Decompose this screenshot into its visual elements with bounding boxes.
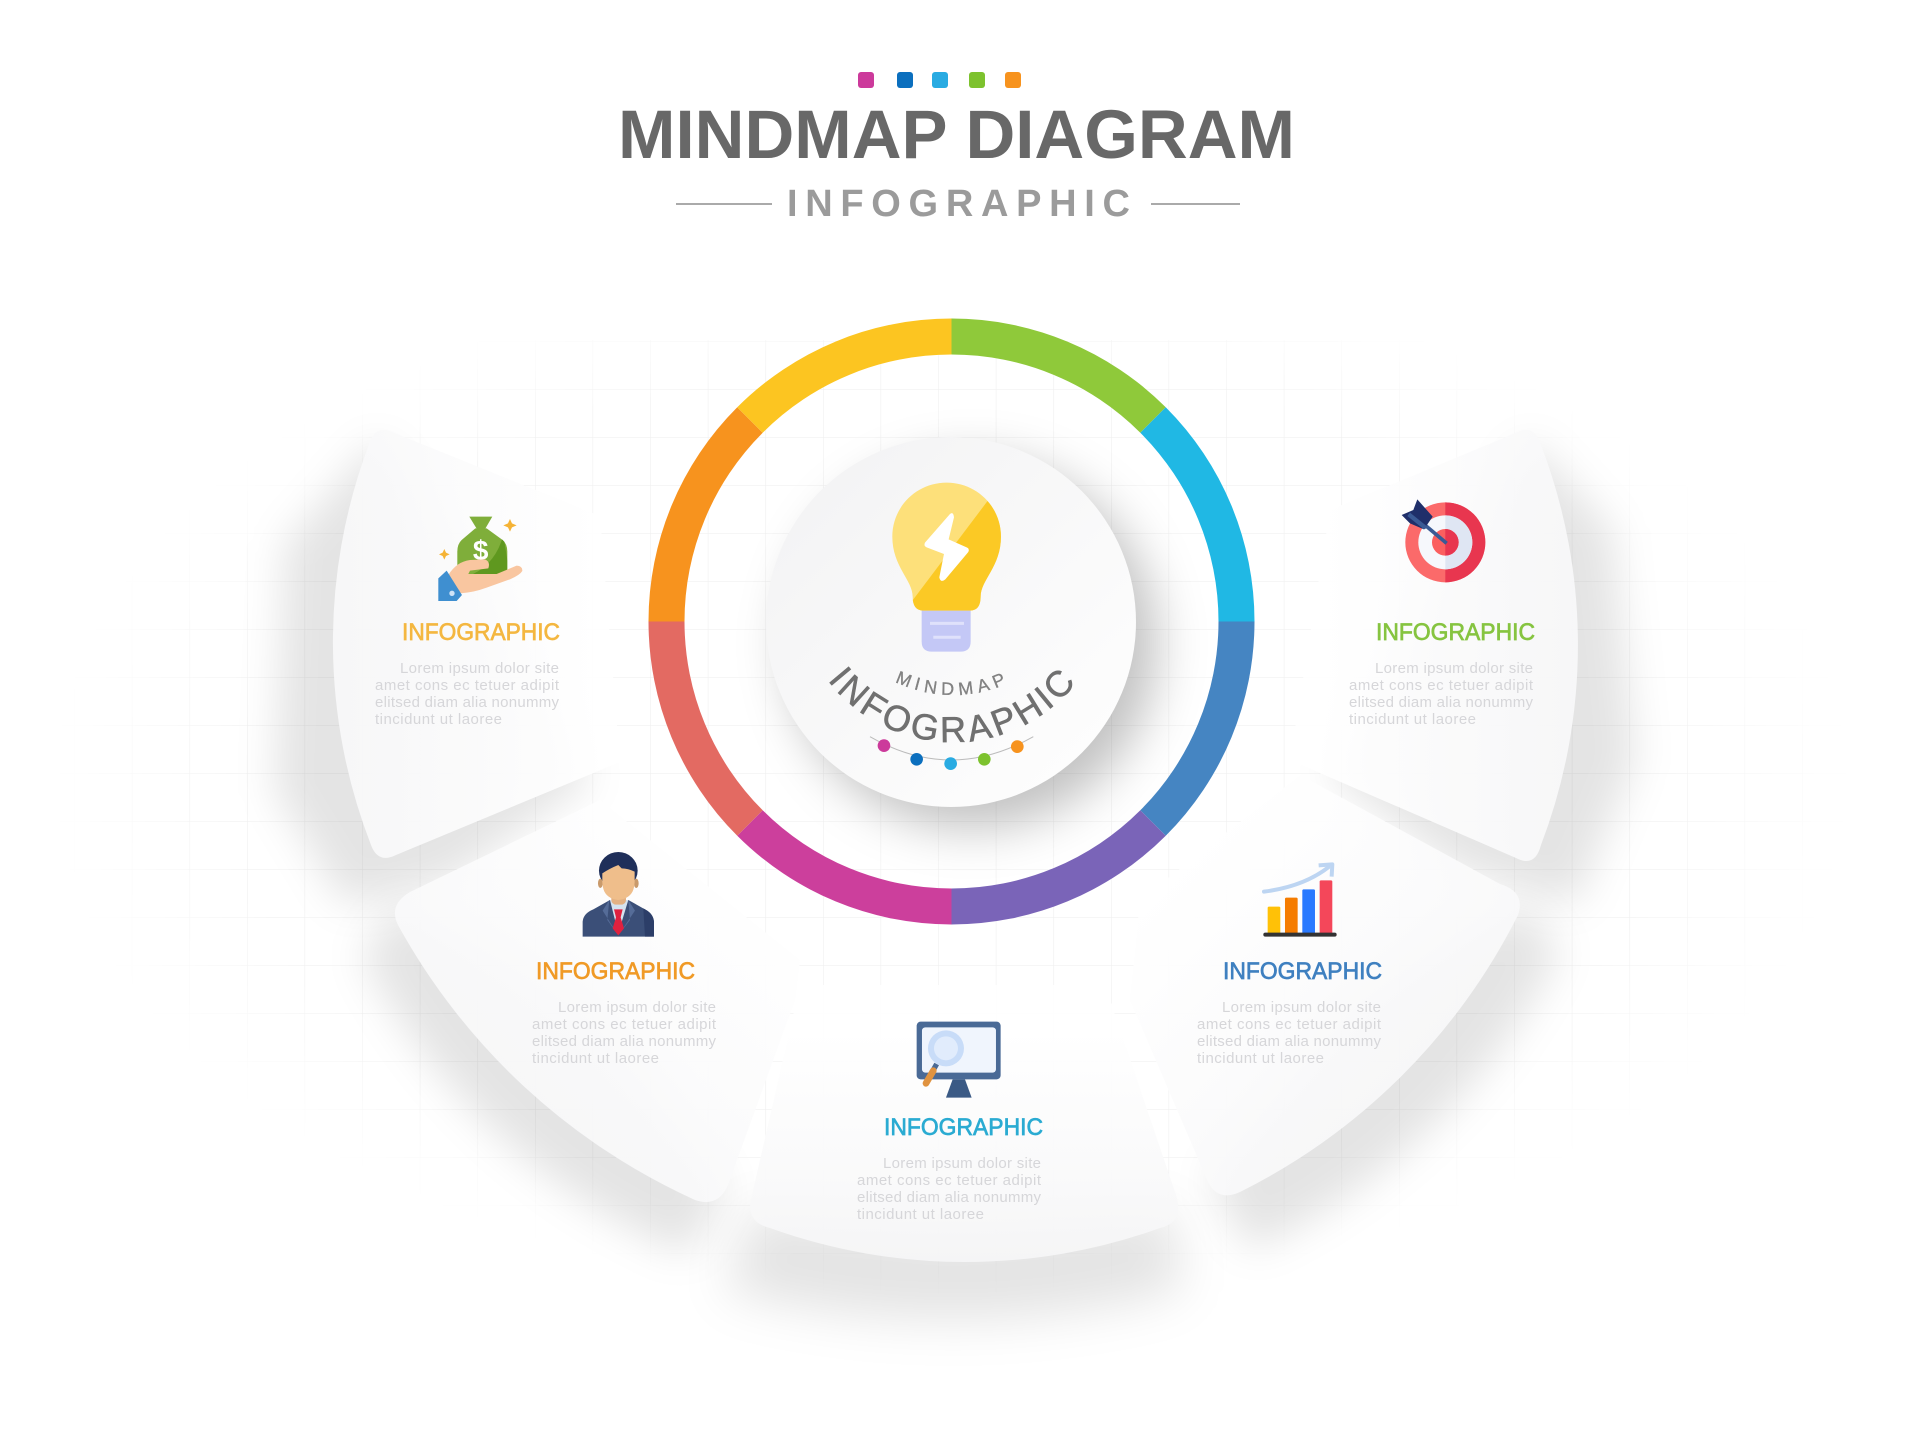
body text: tincidunt ut laoree: [1349, 711, 1476, 728]
heading: INFOGRAPHIC: [536, 958, 695, 985]
panel: bottom monitor: [750, 985, 1178, 1262]
icon: businessman: [583, 852, 654, 937]
panel: upper right target: [1290, 430, 1578, 861]
heading: INFOGRAPHIC: [1376, 619, 1535, 646]
body text: amet cons ec tetuer adipit: [375, 677, 560, 694]
body text: Lorem ipsum dolor site: [400, 660, 559, 677]
panel drop shadows: [275, 440, 1635, 1320]
body text: amet cons ec tetuer adipit: [1349, 677, 1534, 694]
body text: tincidunt ut laoree: [375, 711, 502, 728]
body text: elitsed diam alia nonummy: [1349, 694, 1534, 711]
center hub: [766, 437, 1136, 807]
body text: elitsed diam alia nonummy: [857, 1189, 1042, 1206]
heading: INFOGRAPHIC: [402, 619, 560, 646]
body text: tincidunt ut laoree: [857, 1206, 984, 1223]
heading: INFOGRAPHIC: [1223, 958, 1382, 985]
icon: money bag in hand: [438, 517, 522, 601]
body text: Lorem ipsum dolor site: [1222, 999, 1381, 1016]
curved label: mindmap: MINDMAP: [896, 671, 1003, 696]
heading: INFOGRAPHIC: [884, 1114, 1043, 1141]
body text: elitsed diam alia nonummy: [375, 694, 560, 711]
panel: lower left person: [395, 800, 800, 1202]
segmented color ring: [648, 318, 1254, 924]
icon: money bag in hand: $: [473, 535, 489, 566]
body text: amet cons ec tetuer adipit: [857, 1172, 1042, 1189]
title: MINDMAP DIAGRAM: [618, 96, 1295, 173]
body text: elitsed diam alia nonummy: [532, 1033, 716, 1050]
icon: light bulb: [892, 483, 1007, 652]
subtitle with rules: INFOGRAPHIC: [787, 183, 1130, 225]
icon: monitor with magnifier: [917, 1022, 1001, 1098]
body text: amet cons ec tetuer adipit: [532, 1016, 717, 1033]
necklace of colored dots: [870, 737, 1033, 770]
background grid: [142, 340, 1761, 1206]
icon: dart target: [1402, 499, 1485, 582]
body text: amet cons ec tetuer adipit: [1197, 1016, 1382, 1033]
center circle shadow: [787, 459, 1157, 829]
panel: upper left money: [333, 430, 620, 858]
body text: Lorem ipsum dolor site: [558, 999, 716, 1016]
body text: tincidunt ut laoree: [532, 1050, 659, 1067]
icon: bar chart with arrow: [1263, 864, 1337, 937]
body text: elitsed diam alia nonummy: [1197, 1033, 1382, 1050]
body text: Lorem ipsum dolor site: [1375, 660, 1533, 677]
panel: lower right chart: [1130, 775, 1520, 1195]
infographic canvas: [142, 72, 1761, 1331]
curved label: infographic: INFOGRAPHIC: [829, 666, 1072, 742]
body text: Lorem ipsum dolor site: [883, 1155, 1041, 1172]
body text: tincidunt ut laoree: [1197, 1050, 1324, 1067]
title color squares: [858, 72, 1021, 88]
